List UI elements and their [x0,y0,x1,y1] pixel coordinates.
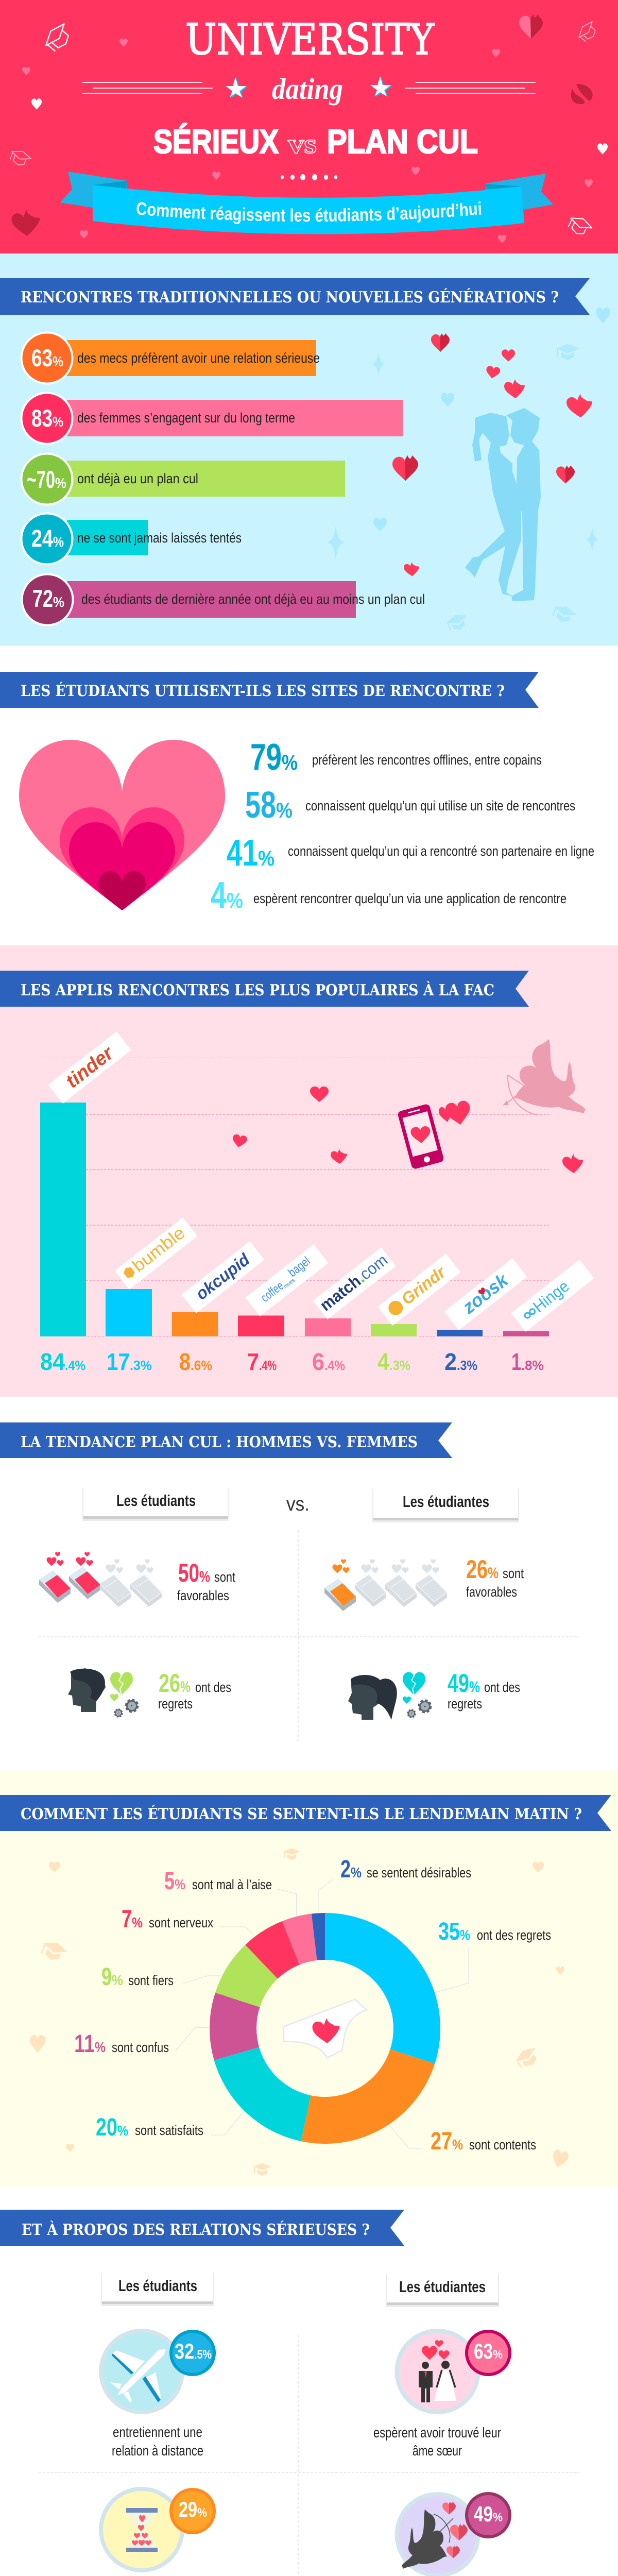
label: 35%: 35 [438,1918,460,1945]
panel: lendemain matin [0,1770,618,2187]
label: zoosk [444,1258,527,1330]
label: 11%: sont confus [112,2040,169,2055]
stat: 49% regrets [448,1669,520,1711]
stat: 41%: 41 [227,833,258,874]
stat: 49% regrets: % [469,1679,480,1696]
label: 9% [101,1963,174,1991]
box: les étudiantes [386,2272,499,2307]
text: âme sœur [413,2443,462,2459]
stat: 58%: 58 [245,785,276,826]
label: 35%: % [460,1927,470,1943]
badge: 63% [467,2331,510,2375]
stat row: ~70%: ont déjà eu un plan cul [77,471,198,486]
stat: 50% favorables: favorables [177,1588,229,1603]
stat row: 72% [22,574,425,625]
icon: underwear with heart [284,1999,367,2058]
stat: 26% favorables [466,1555,524,1600]
stat row: 63%: % [53,353,63,369]
title: Sérieux vs plan cul [153,123,478,160]
values: bar percentages: .3% [457,1358,477,1373]
label: 20% [96,2114,203,2141]
values: bar percentages: .8% [521,1358,544,1373]
section banner 3 [0,971,529,1007]
section banner 3: LES APPLIS RENCONTRES LES PLUS POPULAIRES À LA FAC [21,981,494,999]
values: bar percentages: 1 [511,1348,521,1375]
stat: 49% regrets: ont des [484,1680,520,1695]
stat: 50% favorables: % [199,1568,210,1585]
values: bar percentages: 2 [444,1348,457,1375]
badge: 49%: 49 [474,2502,493,2526]
label: match.com: match [316,1272,364,1315]
stat row: 72%: des étudiants de dernière année ont déjà eu au moins un plan cul [81,591,425,607]
label: 9%: sont fiers [128,1973,174,1988]
stat: 26% favorables: sont [503,1566,524,1581]
stat: 49% regrets: 49 [448,1669,469,1698]
label: coffee meets bagel: bagel [286,1254,313,1280]
text: entretiennent une [113,2424,202,2440]
stat: 26% favorables: % [488,1565,499,1582]
label: 11%: % [95,2039,106,2055]
values: bar percentages [40,1348,544,1375]
stat row: 72%: % [53,594,64,610]
label: match.com [313,1247,396,1319]
stat: 26% regrets: % [180,1679,191,1696]
badge: 63%: 63 [474,2339,493,2363]
values: bar percentages: .4% [324,1358,345,1373]
stat row: 24%: 24 [31,524,53,552]
stat: 79%: 79 [250,737,282,778]
stat: 49% regrets: regrets [448,1696,482,1711]
text [373,2425,501,2459]
box: les étudiantes: Les étudiantes [399,2278,486,2296]
icons: beds men 50% [39,1552,162,1607]
values: bar percentages: 8 [179,1348,191,1375]
values: bar percentages: 6 [312,1348,324,1375]
text [112,2424,203,2459]
stat row: 24% [22,513,242,565]
box: les étudiants [101,2271,214,2306]
label: Grindr: Grindr [398,1262,450,1309]
stat: 79%: préfèrent les rencontres offlines, entre copains [312,752,542,768]
illustration: cupid [503,1039,586,1115]
floating red hearts [392,333,592,576]
box: les étudiants: Les étudiants [118,2277,197,2295]
label: 11%: 11 [74,2030,95,2058]
stat: 26% regrets: ont des [195,1680,231,1695]
label: Grindr [378,1253,460,1326]
donut chart [210,1913,440,2144]
label: coffee meets bagel [246,1244,328,1316]
icon: woman head regrets [348,1672,431,1720]
label: coffee meets bagel: meets [283,1277,296,1290]
values: bar percentages: .3% [130,1358,152,1373]
label: 2%: se sentent désirables [367,1865,471,1880]
label: okcupid: okcupid [192,1249,253,1303]
label: zoosk: zoosk [458,1269,513,1318]
badge: 32.5%: .5% [194,2348,212,2362]
label: tinder: tinder [62,1042,118,1093]
box: les étudiantes [372,1487,519,1522]
badge: 49%: % [493,2511,503,2524]
section banner 1 [0,278,590,315]
section banner 4: LA TENDANCE PLAN CUL : HOMMES VS. FEMMES [21,1433,418,1451]
stat: 58%: % [276,798,293,822]
background decorations [30,1848,570,2176]
label: 35% [438,1918,551,1945]
icon: hourglass in circle [101,2489,182,2570]
label: 2% [340,1856,471,1883]
label: 7% [122,1906,213,1933]
label: match.com: . [353,1268,368,1286]
box: les étudiantes: Les étudiantes [403,1493,489,1511]
label: 9%: 9 [101,1963,112,1991]
values: bar percentages: .3% [389,1358,410,1373]
section banner 2: LES ÉTUDIANTS UTILISENT-ILS LES SITES DE RENCONTRE ? [21,682,505,700]
box: les étudiants [82,1486,229,1521]
stat: 79% [250,737,542,778]
badge: 63%: % [493,2348,503,2362]
panel: hommes vs femmes [0,1422,579,1743]
badge: 29%: % [197,2506,207,2520]
label: 20%: % [117,2123,128,2139]
text: vs.: vs. [286,1494,310,1515]
panel: applis de rencontres [0,945,618,1397]
stat row: 83%: 83 [31,404,53,432]
label: 5%: % [175,1876,185,1892]
label: match.com: com [356,1250,391,1283]
stat: 50% favorables: sont [214,1569,235,1585]
stat: 50% favorables: 50 [178,1558,199,1587]
label: bumble: bumble [129,1223,188,1276]
section banner 5 [0,1795,611,1831]
illustration: phone with hearts [397,1100,473,1170]
label: 27%: 27 [431,2128,452,2155]
label: 7%: % [132,1914,143,1930]
ribbon: Comment réagissent les étudiants d’aujourd’hui [137,201,481,224]
title: Sérieux vs plan cul: SÉRIEUX [153,123,279,160]
text: espèrent avoir trouvé leur [373,2425,501,2441]
label: okcupid [182,1241,264,1313]
label: 20%: sont satisfaits [135,2123,203,2138]
panel: sites de rencontre [0,672,594,916]
values: bar percentages: .4% [259,1358,277,1373]
section banner 6 [0,2210,404,2246]
icon: man head regrets [68,1668,138,1717]
label: 7%: 7 [122,1906,132,1933]
icon: plane in circle [101,2331,182,2412]
badge: 29%: 29 [179,2497,197,2521]
stat: 50% favorables [177,1558,235,1603]
panel: rencontres traditionnelles [0,253,618,646]
section banner 2 [0,672,539,708]
stat: 26% favorables: favorables [466,1584,517,1600]
stat row: 83%: % [53,414,63,430]
badge: 29% [171,2489,214,2533]
stat row: 63%: des mecs préfèrent avoir une relation sérieuse [77,350,320,366]
badge: 49% [467,2494,510,2537]
illustration: couple silhouette [465,408,541,601]
label: bumble [115,1217,197,1290]
stat: 41%: % [258,846,274,870]
stat row: 72%: 72 [32,585,53,612]
title: Sérieux vs plan cul: vs [288,128,317,159]
label: 7%: sont nerveux [149,1915,213,1930]
stat: 4%: % [227,888,243,912]
dating subtitle with lines and stars [82,72,536,106]
stat row: 24%: % [53,534,64,550]
label: 27%: % [452,2137,463,2153]
section banner 6: ET À PROPOS DES RELATIONS SÉRIEUSES ? [22,2221,370,2239]
ribbon [60,172,553,234]
bar chart [40,1103,549,1336]
title: UNIVERSITY: UNIVERSITY [185,15,435,64]
values: bar percentages: 84 [40,1348,65,1375]
floating hearts [231,1087,583,1173]
stat: 58% [245,785,575,826]
stat row: ~70%: % [55,475,66,491]
icons: beds women 26% [324,1559,447,1611]
icon: cupid in circle [397,2494,478,2575]
label: 11% [74,2030,169,2058]
label: 5%: 5 [164,1868,175,1895]
values: bar percentages: 17 [107,1348,130,1375]
stat row: 83% [22,393,403,444]
chart: nested hearts [19,740,225,910]
values: bar percentages: 7 [247,1348,259,1375]
section banner 1: RENCONTRES TRADITIONNELLES OU NOUVELLES GÉNÉRATIONS ? [21,288,559,307]
stat: 4%: 4 [211,875,227,916]
stat: 26% regrets [158,1669,231,1711]
label: 2%: 2 [340,1856,351,1883]
title: Sérieux vs plan cul: PLAN CUL [327,123,478,160]
stat: 26% favorables: 26 [466,1555,488,1584]
stat: 26% regrets: 26 [159,1669,180,1698]
values: bar percentages: .6% [191,1358,212,1373]
badge: 32.5%: 32 [175,2339,194,2363]
stat row: ~70% [22,453,345,505]
header decorations [8,14,608,243]
section background: header [0,0,618,253]
label: coffee meets bagel: coffee [259,1279,286,1305]
stat: 41% [227,833,594,874]
stat: 79%: % [282,750,298,774]
label: Hinge [511,1260,594,1332]
label: 27%: sont contents [469,2137,536,2153]
dating subtitle with lines and stars: dating [272,72,343,106]
background decorations [327,308,610,633]
label: 35%: ont des regrets [477,1927,551,1943]
label: 2%: % [351,1865,362,1880]
label: 9%: % [112,1972,123,1988]
section banner 4 [0,1422,452,1458]
text: relation à distance [112,2443,203,2459]
label: 5% [164,1868,272,1895]
label: tinder [48,1031,131,1104]
label: 20%: 20 [96,2114,117,2141]
stat row: 24%: ne se sont jamais laissés tentés [77,530,242,546]
badge: 32.5% [171,2331,214,2375]
box: les étudiants: Les étudiants [116,1492,196,1510]
values: bar percentages: .4% [65,1358,85,1373]
label: Hinge: Hinge [529,1277,573,1316]
label: 5%: sont mal à l’aise [192,1877,272,1892]
stat: 26% regrets: regrets [158,1696,193,1711]
stat: 4% [211,875,566,916]
stat row: 63% [22,333,320,383]
stat row: 63%: 63 [31,344,53,371]
dots [281,174,337,180]
label: 27% [431,2128,536,2155]
stat row: ~70%: ~70 [27,466,55,493]
panel: relations sérieuses [0,2210,579,2576]
values: bar percentages: 4 [377,1348,389,1375]
stat row: 83%: des femmes s’engagent sur du long terme [77,410,295,426]
icon: bride and groom in circle [397,2331,478,2412]
